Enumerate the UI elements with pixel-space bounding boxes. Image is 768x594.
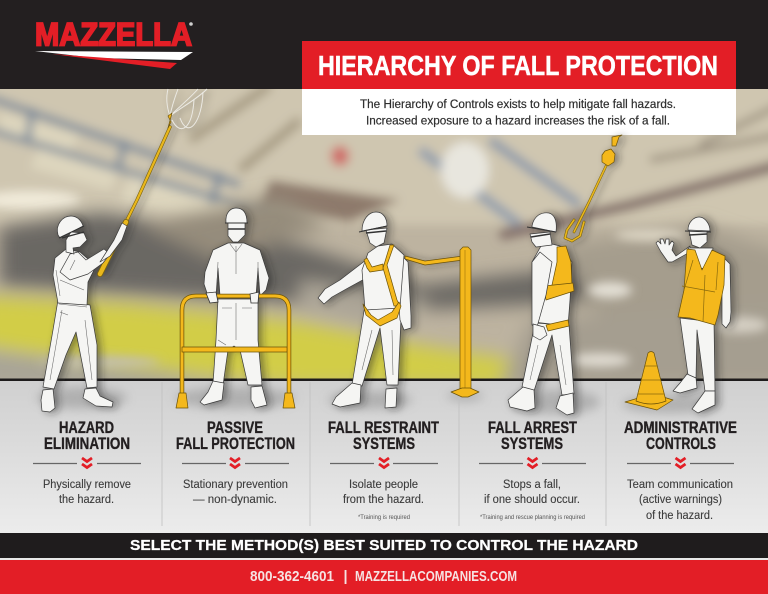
contact footer: 800-362-4601 <box>250 569 334 585</box>
description: Stationary prevention <box>183 477 288 491</box>
description: (active warnings) <box>639 492 722 506</box>
heading <box>176 419 295 453</box>
legs <box>352 302 401 386</box>
divider chevron <box>627 458 734 468</box>
heading <box>488 419 577 453</box>
head and hat <box>66 232 87 254</box>
description <box>484 477 580 506</box>
description <box>43 477 131 506</box>
footnote: *Training and rescue planning is required <box>480 515 585 521</box>
boots <box>508 387 535 411</box>
description: of the hazard. <box>646 508 713 522</box>
boots <box>200 381 224 405</box>
icon: traffic cone <box>625 352 673 410</box>
heading: ADMINISTRATIVE <box>624 419 737 437</box>
heading: SYSTEMS <box>501 435 563 453</box>
head and hat <box>228 222 245 242</box>
heading: FALL ARREST <box>488 419 577 437</box>
heading: FALL RESTRAINT <box>328 419 439 437</box>
torso and arms <box>204 243 269 296</box>
torso <box>532 243 572 326</box>
vest <box>678 249 725 325</box>
heading <box>624 419 737 453</box>
heading: CONTROLS <box>646 435 716 453</box>
description <box>627 477 733 522</box>
boots <box>41 389 55 412</box>
head and hat <box>366 228 387 247</box>
figure: worker in fall arrest harness <box>508 135 622 415</box>
description: if one should occur. <box>484 492 580 506</box>
floor <box>0 381 768 533</box>
heading: FALL PROTECTION <box>176 435 295 453</box>
raised arm and hand <box>656 239 690 262</box>
head and hat <box>689 229 707 248</box>
contact footer: | <box>344 569 348 585</box>
column dividers <box>162 382 606 526</box>
divider chevron <box>182 458 289 468</box>
description <box>183 477 288 506</box>
heading <box>328 419 439 453</box>
logo: MAZZELLA <box>35 16 192 52</box>
heading: PASSIVE <box>207 419 263 437</box>
arms <box>60 249 110 280</box>
column: fall arrest systems <box>479 419 586 521</box>
pole <box>100 127 170 274</box>
description: Isolate people <box>349 477 418 491</box>
head and hat <box>530 232 552 247</box>
legs <box>213 299 262 385</box>
torso <box>53 249 96 305</box>
subtitle box <box>302 89 736 135</box>
boots <box>332 383 361 407</box>
figure: worker with pole <box>41 89 207 412</box>
floor line <box>0 378 768 381</box>
floor shadows <box>37 387 718 414</box>
legs <box>522 323 574 395</box>
arm <box>532 252 552 327</box>
description: Stops a fall, <box>503 477 561 491</box>
legs <box>43 300 97 389</box>
logo <box>35 16 193 69</box>
harness <box>383 245 400 306</box>
heading: SYSTEMS <box>353 435 415 453</box>
left arm <box>318 260 368 304</box>
description: Physically remove <box>43 477 131 491</box>
description <box>343 477 424 506</box>
right arm <box>722 258 731 328</box>
lifeline <box>574 166 606 232</box>
heading <box>44 419 130 453</box>
header band <box>0 0 768 89</box>
figure: worker at guard rail <box>200 208 269 408</box>
call to action band <box>0 533 768 558</box>
heading: ELIMINATION <box>44 435 130 453</box>
column: passive fall protection <box>176 419 295 506</box>
legs <box>680 318 715 391</box>
column: administrative controls <box>624 419 737 522</box>
hook <box>565 220 584 241</box>
description: — non-dynamic. <box>193 492 277 506</box>
description: the hazard. <box>59 492 114 506</box>
description: from the hazard. <box>343 492 424 506</box>
column: fall restraint systems <box>328 419 439 521</box>
footnote: *Training is required <box>358 515 410 521</box>
harness <box>550 246 572 296</box>
heading: HAZARD <box>59 419 114 437</box>
torso <box>362 244 404 310</box>
title banner <box>302 41 736 89</box>
call to action band: SELECT THE METHOD(S) BEST SUITED TO CONTROL THE HAZARD <box>130 538 638 554</box>
right arm <box>398 252 411 330</box>
description: Team communication <box>627 477 733 491</box>
contact footer: MAZZELLACOMPANIES.COM <box>355 569 517 585</box>
lanyard <box>405 256 463 265</box>
sling loops <box>167 89 207 129</box>
divider chevron <box>479 458 586 468</box>
icon: yellow anchor post <box>451 247 479 397</box>
figure: worker in restraint harness <box>318 212 463 408</box>
subtitle box: The Hierarchy of Controls exists to help mitigate fall hazards. <box>360 97 676 111</box>
boots <box>673 374 697 393</box>
pulley <box>602 149 615 166</box>
contact footer <box>0 558 768 594</box>
subtitle box: Increased exposure to a hazard increases the risk of a fall. <box>366 114 670 128</box>
column: hazard elimination <box>33 419 141 506</box>
icon: yellow guard rail <box>176 292 295 408</box>
neck <box>688 248 713 270</box>
divider chevron <box>330 458 438 468</box>
figure: worker in safety vest <box>656 217 731 413</box>
blurred warehouse background <box>0 70 768 386</box>
divider chevron <box>33 458 141 468</box>
